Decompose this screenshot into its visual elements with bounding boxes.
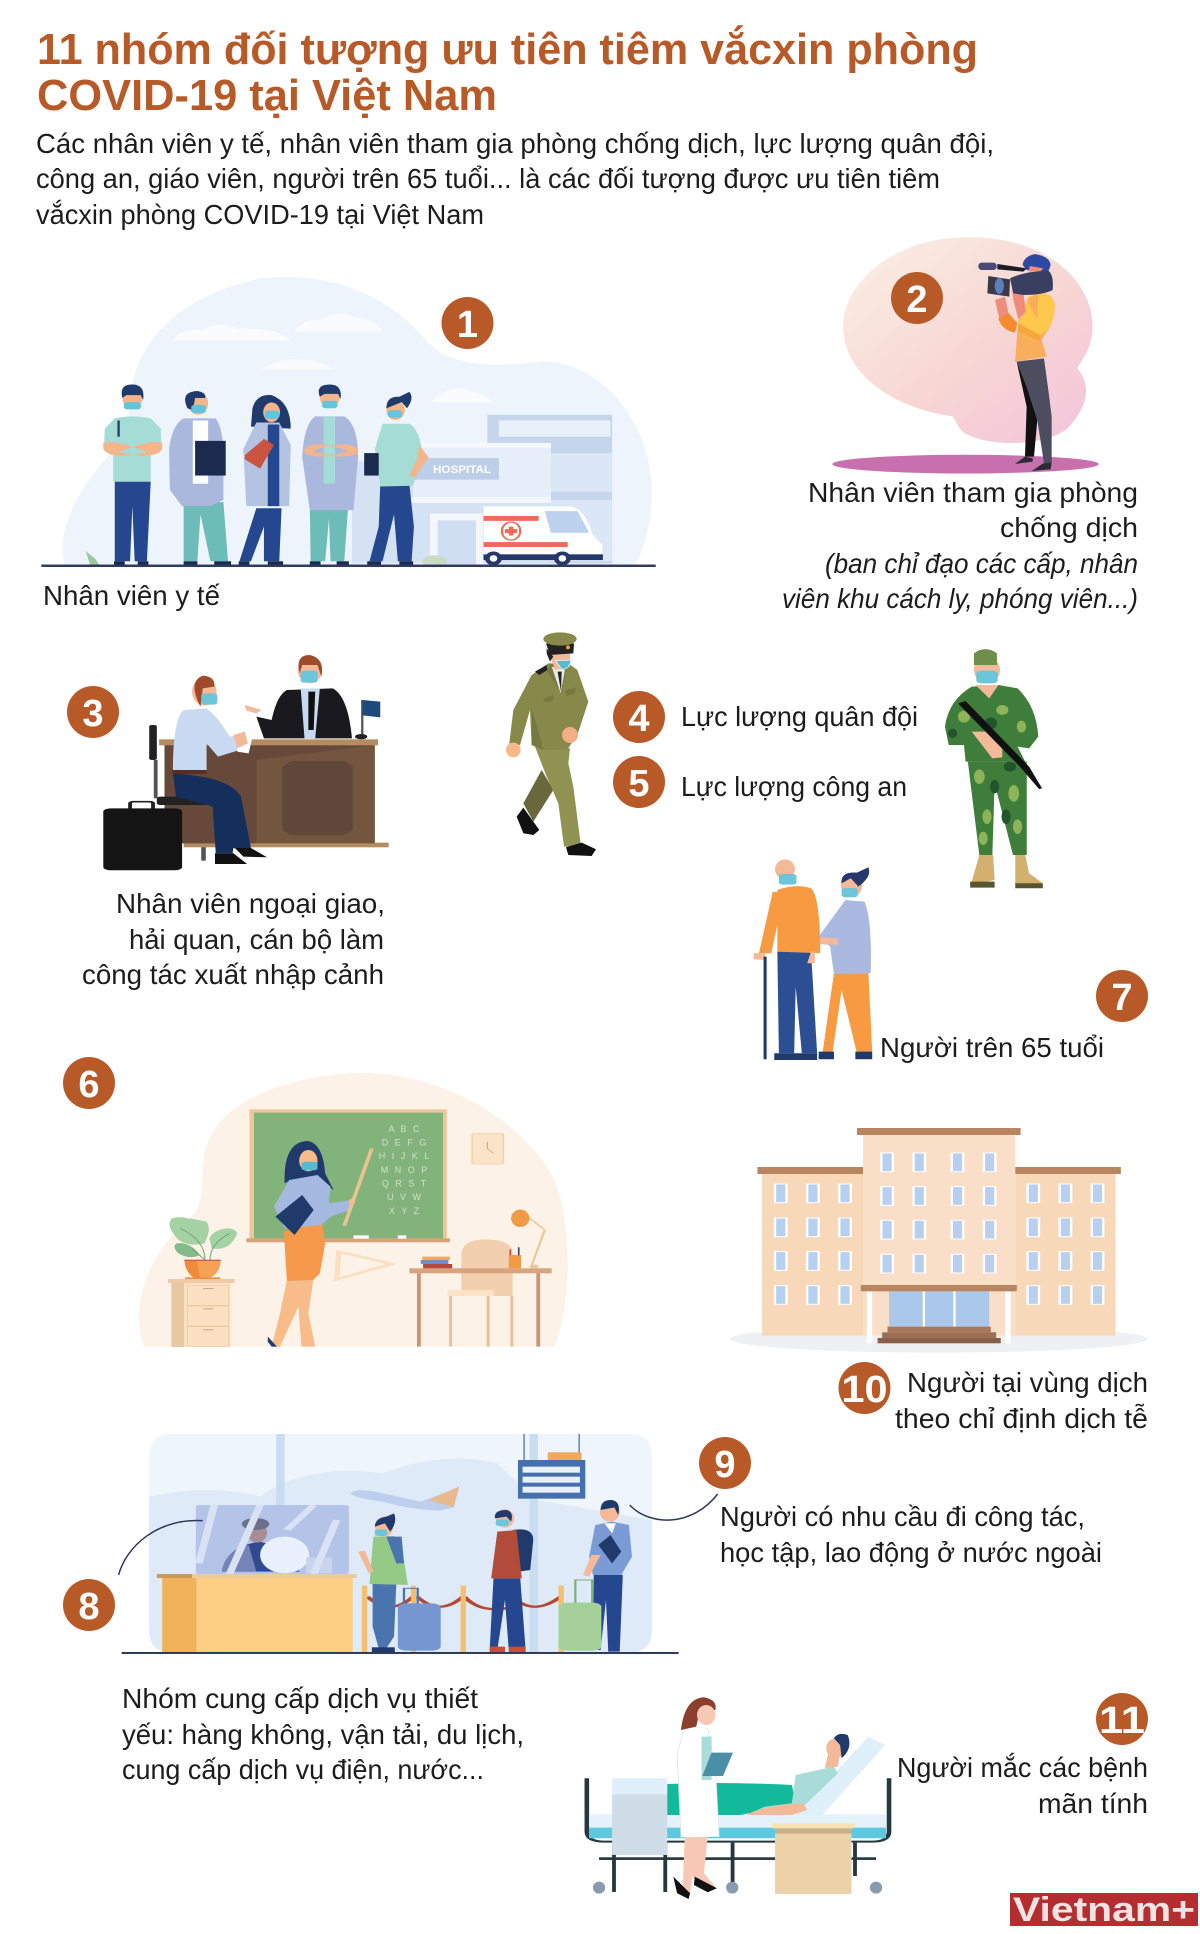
text: group 8 — [122, 1683, 524, 1785]
intro text: công an, giáo viên, người trên 65 tuổi... là các đối tượng được ưu tiên tiêm — [36, 163, 940, 194]
text: group 8: Nhóm cung cấp dịch vụ thiết — [122, 1683, 478, 1714]
flight board — [518, 1434, 585, 1499]
footboard — [612, 1778, 667, 1855]
text: group 9: học tập, lao động ở nước ngoài — [720, 1537, 1102, 1568]
check-in officer — [196, 1505, 349, 1574]
doctor 4 — [302, 385, 358, 565]
badge 3: 3 — [82, 693, 104, 735]
plane — [350, 1487, 459, 1511]
desk and chair — [409, 1210, 552, 1347]
man with cane — [754, 859, 820, 1060]
badge 8 — [63, 1579, 115, 1631]
doctor 5 — [364, 392, 428, 565]
badge 10: 10 — [842, 1369, 888, 1411]
counter — [157, 1574, 357, 1653]
text: groups 4 and 5: Lực lượng quân đội — [681, 701, 918, 732]
doctor 2 — [169, 391, 231, 565]
badge 1: 1 — [457, 304, 478, 346]
badge 1 — [442, 297, 494, 349]
text: groups 4 and 5 — [681, 701, 918, 802]
badge 11: 11 — [1099, 1700, 1145, 1742]
text: group 1: Nhân viên y tế — [43, 580, 220, 611]
blackboard letters — [379, 1124, 431, 1216]
badge 8: 8 — [78, 1586, 100, 1628]
badge 7: 7 — [1111, 977, 1133, 1019]
blackboard letters: H I J K L — [379, 1151, 431, 1161]
title — [37, 24, 978, 120]
logo: Vietnam+: Vietnam+ — [1013, 1891, 1195, 1929]
illustration: school building — [730, 1128, 1148, 1353]
badge 9: 9 — [714, 1444, 736, 1486]
intro text: vắcxin phòng COVID-19 tại Việt Nam — [36, 199, 484, 230]
text: group 2: chống dịch — [1000, 512, 1138, 543]
badge 11 — [1096, 1693, 1148, 1745]
text: group 8: yếu: hàng không, vận tải, du lịch, — [122, 1719, 524, 1750]
text: group 11: Người mắc các bệnh — [897, 1752, 1148, 1783]
illustration: soldier — [945, 649, 1043, 888]
text: group 10: theo chỉ định dịch tễ — [895, 1403, 1148, 1434]
blackboard letters: A B C — [388, 1124, 422, 1134]
illustration: teacher and classroom — [139, 1073, 568, 1347]
blackboard letters: U V W — [387, 1192, 423, 1202]
illustration: airport check-in — [119, 1434, 679, 1654]
text: group 3: Nhân viên ngoại giao, — [116, 888, 385, 919]
illustration: elderly couple — [754, 859, 872, 1060]
illustration: customs desk — [103, 655, 389, 870]
queue barriers — [362, 1586, 564, 1652]
text: group 10 — [895, 1367, 1148, 1434]
intro text: Các nhân viên y tế, nhân viên tham gia phòng chống dịch, lực lượng quân đội, — [36, 128, 994, 159]
passenger woman — [358, 1513, 441, 1652]
text: group 2: viên khu cách ly, phóng viên...) — [782, 583, 1138, 614]
text: group 3 — [82, 888, 385, 990]
text: group 3: hải quan, cán bộ làm — [129, 924, 384, 955]
title: COVID-19 tại Việt Nam — [37, 71, 497, 120]
windows — [775, 1153, 1103, 1304]
text: group 11 — [897, 1752, 1148, 1819]
badge 10 — [838, 1362, 890, 1414]
badge 7 — [1096, 970, 1148, 1022]
side table — [772, 1823, 855, 1894]
blackboard letters: D E F G — [382, 1138, 428, 1148]
connector to badge 9 — [630, 1494, 718, 1520]
intro text — [36, 128, 994, 230]
connector to badge 8 — [119, 1521, 203, 1575]
text: group 2: (ban chỉ đạo các cấp, nhân — [825, 548, 1138, 579]
text: group 7: Người trên 65 tuổi — [880, 1032, 1104, 1063]
blackboard letters: M N O P — [381, 1165, 429, 1175]
badge 5 — [613, 756, 665, 808]
text: group 11: mãn tính — [1038, 1788, 1148, 1819]
seated man — [157, 676, 267, 864]
text: group 2: Nhân viên tham gia phòng — [808, 477, 1138, 508]
badge 3 — [67, 686, 119, 738]
blackboard letters: Q R S T — [382, 1178, 428, 1188]
teacher — [268, 1141, 372, 1347]
doctor 3 — [239, 395, 291, 565]
patient — [667, 1734, 849, 1815]
text: group 10: Người tại vùng dịch — [907, 1367, 1148, 1398]
suitcase — [103, 802, 182, 870]
passenger man with suitcase — [559, 1500, 632, 1652]
badge 9 — [699, 1437, 751, 1489]
doctor — [673, 1697, 733, 1899]
badge 2 — [891, 272, 943, 324]
badge 5: 5 — [628, 763, 650, 805]
text: group 9 — [720, 1501, 1102, 1568]
passenger man with backpack — [490, 1509, 533, 1653]
illustration: medical staff and hospital: HOSPITAL — [433, 464, 491, 476]
text: group 8: cung cấp dịch vụ điện, nước... — [122, 1754, 484, 1785]
illustration: medical staff and hospital — [41, 277, 656, 567]
badge 2: 2 — [906, 279, 928, 321]
badge 4: 4 — [628, 698, 650, 740]
badge 4 — [613, 691, 665, 743]
blackboard letters: X Y Z — [389, 1206, 421, 1216]
ambulance — [484, 506, 603, 565]
doctor 1 — [103, 384, 162, 565]
illustration: cameraman — [832, 237, 1099, 474]
illustration: police officer — [506, 632, 596, 856]
entrance — [861, 1285, 1017, 1343]
text: groups 4 and 5: Lực lượng công an — [681, 771, 907, 802]
plant and cabinet — [168, 1217, 237, 1347]
title: 11 nhóm đối tượng ưu tiên tiêm vắcxin phòng — [37, 24, 978, 74]
illustration: doctor and patient — [587, 1697, 889, 1899]
text: group 2 — [782, 477, 1138, 614]
badge 6: 6 — [78, 1064, 100, 1106]
badge 6 — [63, 1057, 115, 1109]
text: group 3: công tác xuất nhập cảnh — [82, 959, 384, 990]
man behind desk — [245, 655, 352, 738]
text: group 9: Người có nhu cầu đi công tác, — [720, 1501, 1085, 1532]
woman — [809, 867, 872, 1059]
